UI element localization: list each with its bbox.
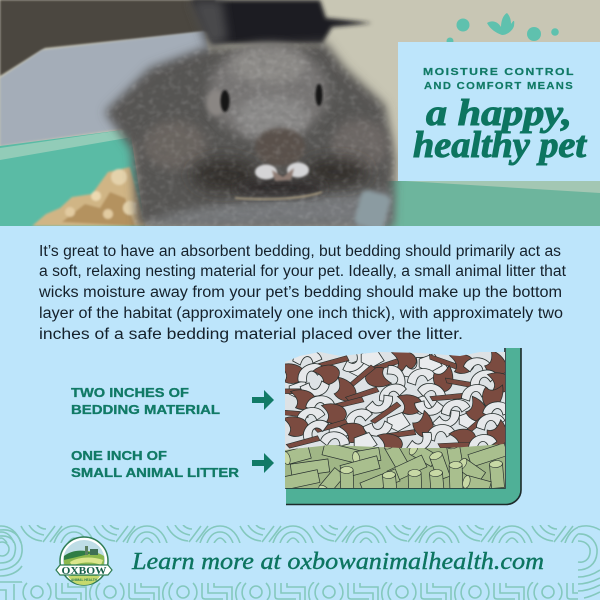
logo: Oxbow: ANIMAL HEALTH	[71, 578, 98, 582]
footer pattern band	[0, 525, 600, 600]
subtitle: AND COMFORT MEANS	[424, 81, 574, 92]
heading: a happy,	[426, 93, 572, 134]
litter layer	[285, 444, 505, 488]
heading	[413, 93, 588, 166]
subtitle	[423, 67, 575, 92]
label: two inches of bedding material: TWO INCHES OF	[71, 386, 189, 400]
diagram: habitat layers	[274, 347, 521, 505]
body text: a soft, relaxing nesting material for your pet. Ideally, a small animal litter that	[39, 263, 567, 280]
label: two inches of bedding material: BEDDING MATERIAL	[71, 403, 220, 417]
logo: Oxbow	[56, 537, 112, 585]
body text: layer of the habitat (approximately one inch thick), with approximately two	[39, 305, 563, 322]
body text: It’s great to have an absorbent bedding, but bedding should primarily act as	[39, 243, 561, 260]
panel: title box	[398, 42, 600, 181]
heading: healthy pet	[413, 125, 588, 166]
body text: wicks moisture away from your pet’s bedding should make up the bottom	[38, 284, 562, 301]
label: one inch of small animal litter: ONE INCH OF	[71, 449, 167, 463]
label: one inch of small animal litter	[71, 449, 239, 480]
photo: rabbit in a habitat	[0, 0, 600, 231]
bedding layer	[285, 352, 505, 450]
body text	[38, 243, 567, 343]
icon: decorative teal dots and leaves	[446, 13, 559, 44]
rabbit	[105, 0, 395, 231]
label: two inches of bedding material	[71, 386, 220, 417]
footer call to action: Learn more at oxbowanimalhealth.com	[131, 548, 544, 575]
habitat wall and floor	[286, 348, 521, 505]
body text: inches of a safe bedding material placed over the litter.	[39, 326, 463, 343]
label: one inch of small animal litter: SMALL ANIMAL LITTER	[71, 466, 239, 480]
subtitle: MOISTURE CONTROL	[423, 67, 575, 78]
arrow: to bedding layer	[252, 390, 274, 410]
logo: Oxbow: OXBOW	[62, 565, 106, 577]
arrow: to litter layer	[252, 453, 274, 473]
